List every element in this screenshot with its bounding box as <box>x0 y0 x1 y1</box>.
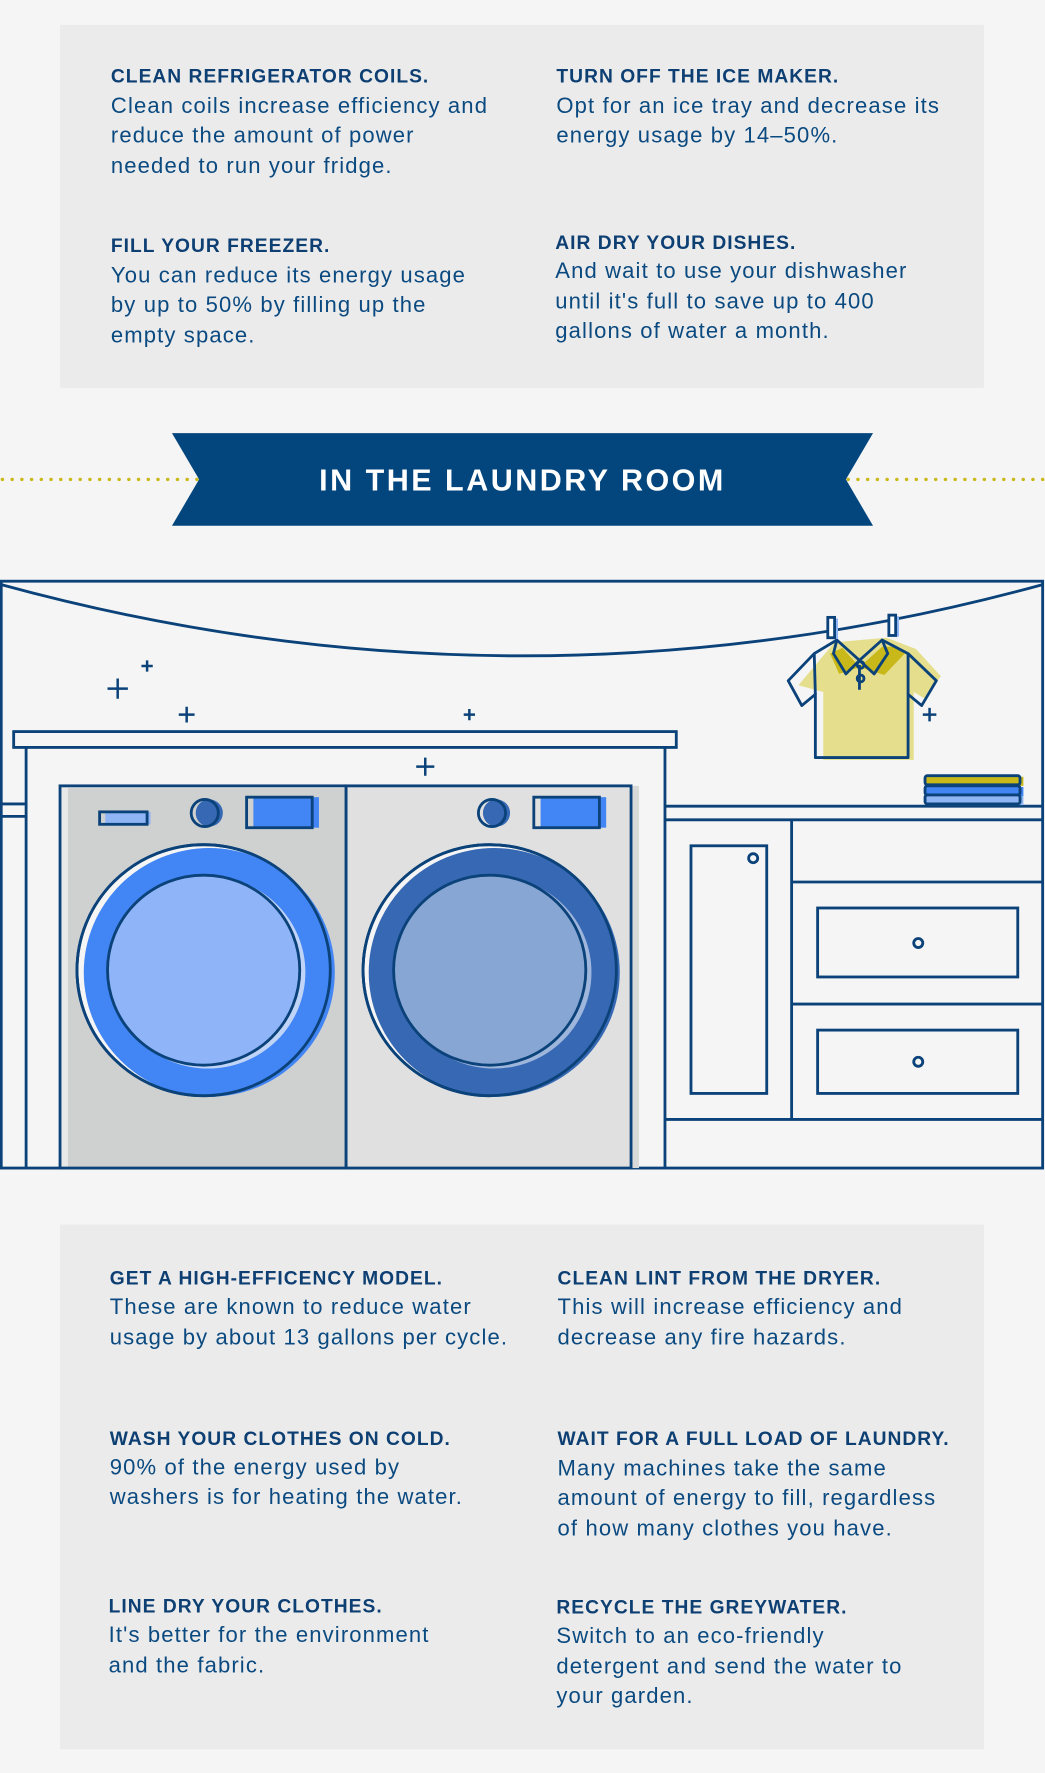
tip: full load: WAIT FOR A FULL LOAD OF LAUNDRY. <box>558 1429 950 1450</box>
tip: full load: amount of energy to fill, regardless <box>558 1485 936 1510</box>
tip: line dry <box>109 1596 430 1677</box>
tip: fill your freezer: FILL YOUR FREEZER. <box>111 236 330 257</box>
right cabinet <box>665 806 1043 1119</box>
tip: turn off the ice maker: energy usage by 14–50%. <box>556 122 838 147</box>
tip: line dry: and the fabric. <box>109 1652 265 1677</box>
tip: air dry your dishes: gallons of water a month. <box>555 318 830 343</box>
tip: turn off the ice maker <box>556 67 940 147</box>
tip: wash on cold: 90% of the energy used by <box>110 1454 400 1479</box>
tip: high efficiency model: These are known to reduce water <box>110 1294 472 1319</box>
tip: wash on cold: WASH YOUR CLOTHES ON COLD. <box>110 1429 451 1450</box>
tip: air dry your dishes: AIR DRY YOUR DISHES. <box>555 233 796 254</box>
folded towels <box>925 776 1023 805</box>
tip: turn off the ice maker: Opt for an ice tray and decrease its <box>556 93 940 118</box>
tip: clean refrigerator coils: CLEAN REFRIGERATOR COILS. <box>111 67 429 88</box>
tip: air dry your dishes: And wait to use your dishwasher <box>555 258 908 283</box>
tip: clean lint: This will increase efficiency and <box>558 1294 903 1319</box>
banner: in the laundry room <box>2 433 1045 526</box>
tip: fill your freezer: by up to 50% by filling up the <box>111 292 427 317</box>
tip: greywater: RECYCLE THE GREYWATER. <box>556 1598 848 1619</box>
panel: kitchen tips <box>60 25 984 388</box>
tip: wash on cold: washers is for heating the water. <box>109 1484 463 1509</box>
tip: fill your freezer: You can reduce its energy usage <box>111 263 466 288</box>
banner: in the laundry room: IN THE LAUNDRY ROOM <box>319 464 726 498</box>
tip: greywater: your garden. <box>556 1683 694 1708</box>
tip: greywater: Switch to an eco-friendly <box>556 1623 825 1648</box>
tip: full load: of how many clothes you have. <box>558 1516 893 1541</box>
panel: laundry tips <box>60 1225 984 1749</box>
tip: clean refrigerator coils: needed to run your fridge. <box>111 153 393 178</box>
tip: clean lint <box>558 1269 903 1349</box>
tip: full load: Many machines take the same <box>558 1456 887 1481</box>
left wall shelf <box>1 804 26 816</box>
tip: fill your freezer <box>111 236 466 348</box>
tip: fill your freezer: empty space. <box>111 323 256 348</box>
tip: line dry: LINE DRY YOUR CLOTHES. <box>109 1596 383 1617</box>
tip: greywater <box>556 1598 903 1708</box>
tip: clean lint: decrease any fire hazards. <box>558 1324 847 1349</box>
clothesline <box>1 585 1043 656</box>
tip: wash on cold <box>109 1429 463 1509</box>
sparkles <box>108 660 936 776</box>
tip: line dry: It's better for the environment <box>109 1622 430 1647</box>
tip: air dry your dishes: until it's full to save up to 400 <box>555 289 875 314</box>
washer <box>60 786 346 1168</box>
tip: full load <box>558 1429 950 1541</box>
tip: air dry your dishes <box>555 233 908 343</box>
shirt on line <box>788 615 941 760</box>
tip: high efficiency model: usage by about 13 gallons per cycle. <box>110 1324 508 1349</box>
tip: turn off the ice maker: TURN OFF THE ICE MAKER. <box>556 67 839 88</box>
dryer <box>346 786 639 1168</box>
countertop and cabinet <box>14 732 676 1168</box>
illustration: laundry room <box>1 581 1043 1168</box>
tip: high efficiency model: GET A HIGH-EFFICENCY MODEL. <box>110 1269 443 1290</box>
tip: greywater: detergent and send the water to <box>556 1653 903 1678</box>
tip: clean refrigerator coils <box>111 67 488 178</box>
tip: clean refrigerator coils: reduce the amount of power <box>111 122 415 147</box>
tip: clean lint: CLEAN LINT FROM THE DRYER. <box>558 1269 881 1290</box>
tip: high efficiency model <box>110 1269 508 1349</box>
tip: clean refrigerator coils: Clean coils increase efficiency and <box>111 93 488 118</box>
